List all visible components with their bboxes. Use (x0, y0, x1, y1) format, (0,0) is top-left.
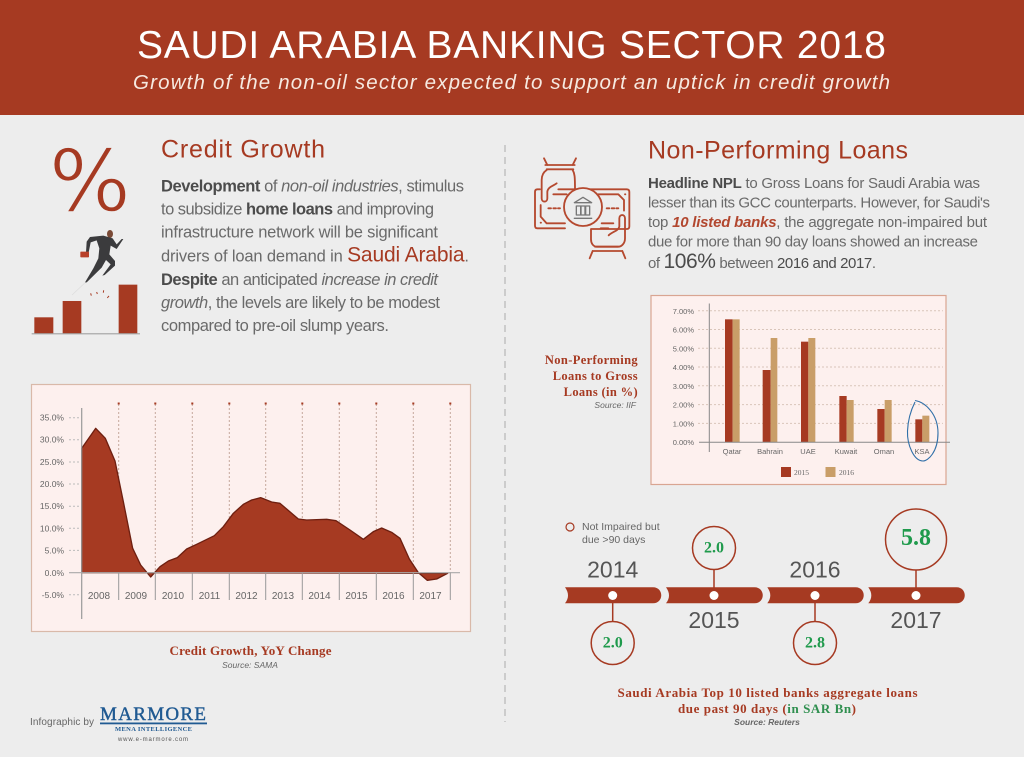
text block: credit growth: to subsidize home loans and improving (161, 200, 434, 218)
icon: growth bars (32, 281, 140, 334)
y axis labels: 5.00% (673, 344, 694, 354)
caption: timeline (618, 685, 918, 716)
legend: 2016 (839, 468, 854, 477)
legend: 2015 (794, 468, 809, 477)
text block: credit growth: Development of non-oil industries, stimulus (161, 178, 464, 196)
y axis labels: 25.0% (40, 457, 64, 467)
values: 2.0 (603, 634, 623, 652)
x axis country labels: KSA (914, 447, 930, 456)
x axis year labels: 2009 (125, 591, 148, 602)
text block: non-performing loans: due for more than 90 day loans showed an increase (648, 234, 978, 250)
caption: timeline: Saudi Arabia Top 10 listed banks aggregate loans (618, 685, 918, 700)
x axis year labels: 2015 (345, 591, 368, 602)
x axis year labels: 2014 (308, 591, 331, 602)
caption: NPL chart (545, 353, 638, 399)
connectors and circles (591, 509, 946, 664)
bars (725, 319, 929, 442)
caption: NPL chart: Loans (in %) (564, 385, 638, 399)
y axis labels (673, 307, 694, 447)
y axis labels: 10.0% (40, 524, 64, 534)
x axis country labels: Oman (874, 447, 894, 456)
footer logo: MENA INTELLIGENCE (115, 726, 192, 733)
y axis labels: 5.0% (45, 546, 64, 556)
y axis labels: 15.0% (40, 501, 64, 511)
y axis labels: 0.00% (673, 438, 694, 447)
text block: non-performing loans (648, 175, 990, 273)
footer logo: www.e-marmore.com (117, 737, 188, 743)
x axis year labels: 2016 (382, 591, 405, 602)
caption: NPL chart: Loans to Gross (553, 369, 638, 383)
icon: percent sign: % (49, 132, 131, 232)
caption: credit growth chart: Credit Growth, YoY Change (170, 643, 332, 658)
icon: hands exchanging bank note (535, 158, 629, 258)
heading: non-performing loans: Non-Performing Loans (648, 136, 908, 164)
x axis country labels: Kuwait (835, 447, 858, 456)
y axis labels: 6.00% (673, 326, 694, 334)
legend: not impaired: Not Impaired but (582, 521, 660, 533)
y axis labels: 7.00% (673, 307, 694, 316)
x axis year labels: 2008 (88, 591, 111, 602)
text block: credit growth: compared to pre-oil slump years. (161, 317, 389, 335)
heading: credit growth: Credit Growth (161, 136, 325, 164)
y axis labels: 35.0% (40, 412, 64, 422)
x axis year labels: 2011 (199, 591, 221, 602)
timeline: 5.8 (901, 525, 931, 551)
area series (82, 428, 448, 580)
legend (781, 467, 854, 477)
x axis year labels (88, 591, 442, 602)
x axis year labels: 2012 (235, 591, 258, 602)
x axis country labels: UAE (800, 447, 816, 456)
legend: not impaired (566, 521, 660, 546)
icon: businessman jumping (80, 230, 123, 282)
footer logo: Infographic by (30, 717, 94, 728)
KSA highlight ring (907, 400, 938, 461)
panel: credit growth area chart (32, 384, 470, 632)
text block: credit growth: growth, the levels are likely to be modest (161, 294, 440, 312)
y axis labels: -5.0% (42, 590, 64, 600)
timeline: 2015 (688, 607, 740, 633)
timeline: 2.0 (704, 540, 724, 557)
legend: not impaired: due >90 days (582, 534, 645, 546)
timeline bars (565, 587, 965, 603)
source: Reuters: Source: Reuters (734, 717, 800, 727)
text block: credit growth: infrastructure network will be significant (161, 224, 438, 242)
footer logo (30, 704, 207, 743)
footer logo: MARMORE (100, 704, 206, 725)
text block: non-performing loans: lesser than its GCC counterparts. However, for Saudi's (648, 194, 990, 212)
text block: non-performing loans: top 10 listed banks, the aggregate non-impaired but (648, 214, 988, 231)
y axis labels: 4.00% (673, 363, 694, 372)
timeline (565, 509, 965, 664)
source: IIF: Source: IIF (594, 400, 637, 410)
x axis year labels: 2013 (272, 591, 295, 602)
text block: non-performing loans: of 106% between 2016 and 2017. (648, 250, 876, 273)
year labels: 2014 (587, 557, 638, 583)
text block: non-performing loans: Headline NPL to Gross Loans for Saudi Arabia was (648, 175, 980, 192)
x axis country labels: Bahrain (757, 447, 783, 456)
x axis year labels: 2010 (162, 591, 185, 602)
subtitle: Growth of the non-oil sector expected to support an uptick in credit growth (133, 71, 890, 94)
title: SAUDI ARABIA BANKING SECTOR 2018 (137, 24, 886, 67)
x axis country labels: Qatar (723, 447, 742, 456)
x axis country labels (723, 447, 930, 456)
text block: credit growth: Despite an anticipated increase in credit (161, 271, 439, 289)
panel: NPL bar chart (651, 296, 950, 484)
y axis labels: 2.00% (673, 400, 694, 410)
source: SAMA: Source: SAMA (222, 660, 278, 670)
header banner (0, 0, 1024, 115)
timeline: 2016 (789, 557, 841, 583)
y axis labels: 1.00% (673, 420, 694, 428)
y axis labels (40, 412, 64, 600)
caption: timeline: due past 90 days (in SAR Bn) (678, 701, 856, 716)
timeline: 2017 (890, 607, 942, 633)
y axis labels: 20.0% (40, 479, 64, 489)
x axis year labels: 2017 (419, 591, 442, 602)
y axis labels: 30.0% (40, 434, 64, 444)
timeline: 2.8 (805, 634, 825, 652)
text block: credit growth (161, 178, 469, 335)
y axis labels: 0.0% (45, 568, 64, 578)
caption: NPL chart: Non-Performing (545, 353, 638, 367)
y axis labels: 3.00% (673, 382, 694, 391)
text block: credit growth: drivers of loan demand in Saudi Arabia. (161, 244, 469, 266)
